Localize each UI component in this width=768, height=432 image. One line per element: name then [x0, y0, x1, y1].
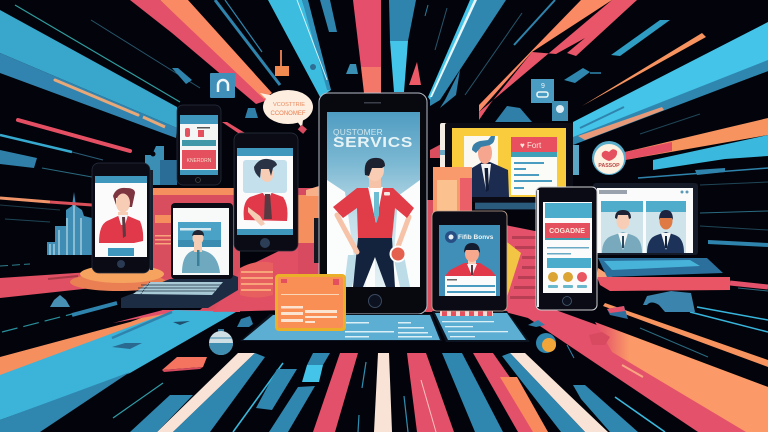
phone: agent with dark hair	[234, 133, 298, 251]
phone: right with app: COGADNE	[549, 228, 585, 235]
orange box	[433, 167, 472, 212]
icon: app tile	[210, 73, 235, 98]
laptop with two agents	[593, 183, 768, 291]
streaks: top right	[479, 0, 768, 291]
desk panel with document	[240, 314, 442, 341]
red platform under left devices	[0, 188, 240, 310]
orange and red side line	[0, 198, 92, 266]
icons: phone tiles top right: 9	[541, 83, 545, 90]
streaks: bottom left	[0, 290, 240, 432]
phone: top left: KNERDRN	[187, 158, 212, 164]
icon: house silhouette	[145, 146, 177, 185]
glass sphere	[209, 329, 233, 355]
streaks: bottom right	[528, 300, 768, 432]
tablet with agent	[432, 211, 521, 311]
red central backdrop	[213, 186, 322, 312]
speaker and home button	[364, 102, 382, 308]
phone: left with red jacket person	[92, 163, 153, 273]
small mounds	[50, 291, 695, 327]
monitor with agent	[440, 123, 579, 210]
small skyline chart	[47, 192, 92, 255]
monitor with agent: ♥ Fort	[520, 141, 542, 150]
phone: right with app	[536, 187, 597, 310]
agent figure	[333, 158, 414, 287]
phone: top left	[177, 105, 221, 185]
icon: orange robot	[275, 50, 289, 76]
screen title: QUSTOMER	[333, 127, 383, 137]
main phone: customer service	[319, 93, 427, 314]
badge: heart	[592, 141, 626, 175]
phone screen	[327, 112, 420, 287]
speech bubble	[260, 90, 313, 134]
streaks: top left	[0, 5, 240, 210]
tablet with agent: Fifib Bonvs	[458, 234, 494, 241]
orange card	[275, 274, 346, 331]
streaks: bottom stripes	[130, 353, 665, 432]
speech bubble: CCONOMEF	[270, 111, 306, 117]
streaks: top centre	[130, 0, 555, 135]
icons: phone tiles top right	[531, 79, 568, 121]
icons: small floating shapes top	[245, 62, 601, 122]
red right backdrop	[425, 142, 540, 322]
speech bubble: VCOSTTRIE	[273, 102, 305, 108]
badge: heart: PASSOP	[598, 163, 620, 169]
desk panel right with striped header	[432, 311, 530, 342]
orange ball	[536, 333, 556, 353]
main phone: customer service: SERVICS	[333, 135, 413, 151]
tablet on keyboard	[121, 203, 238, 308]
